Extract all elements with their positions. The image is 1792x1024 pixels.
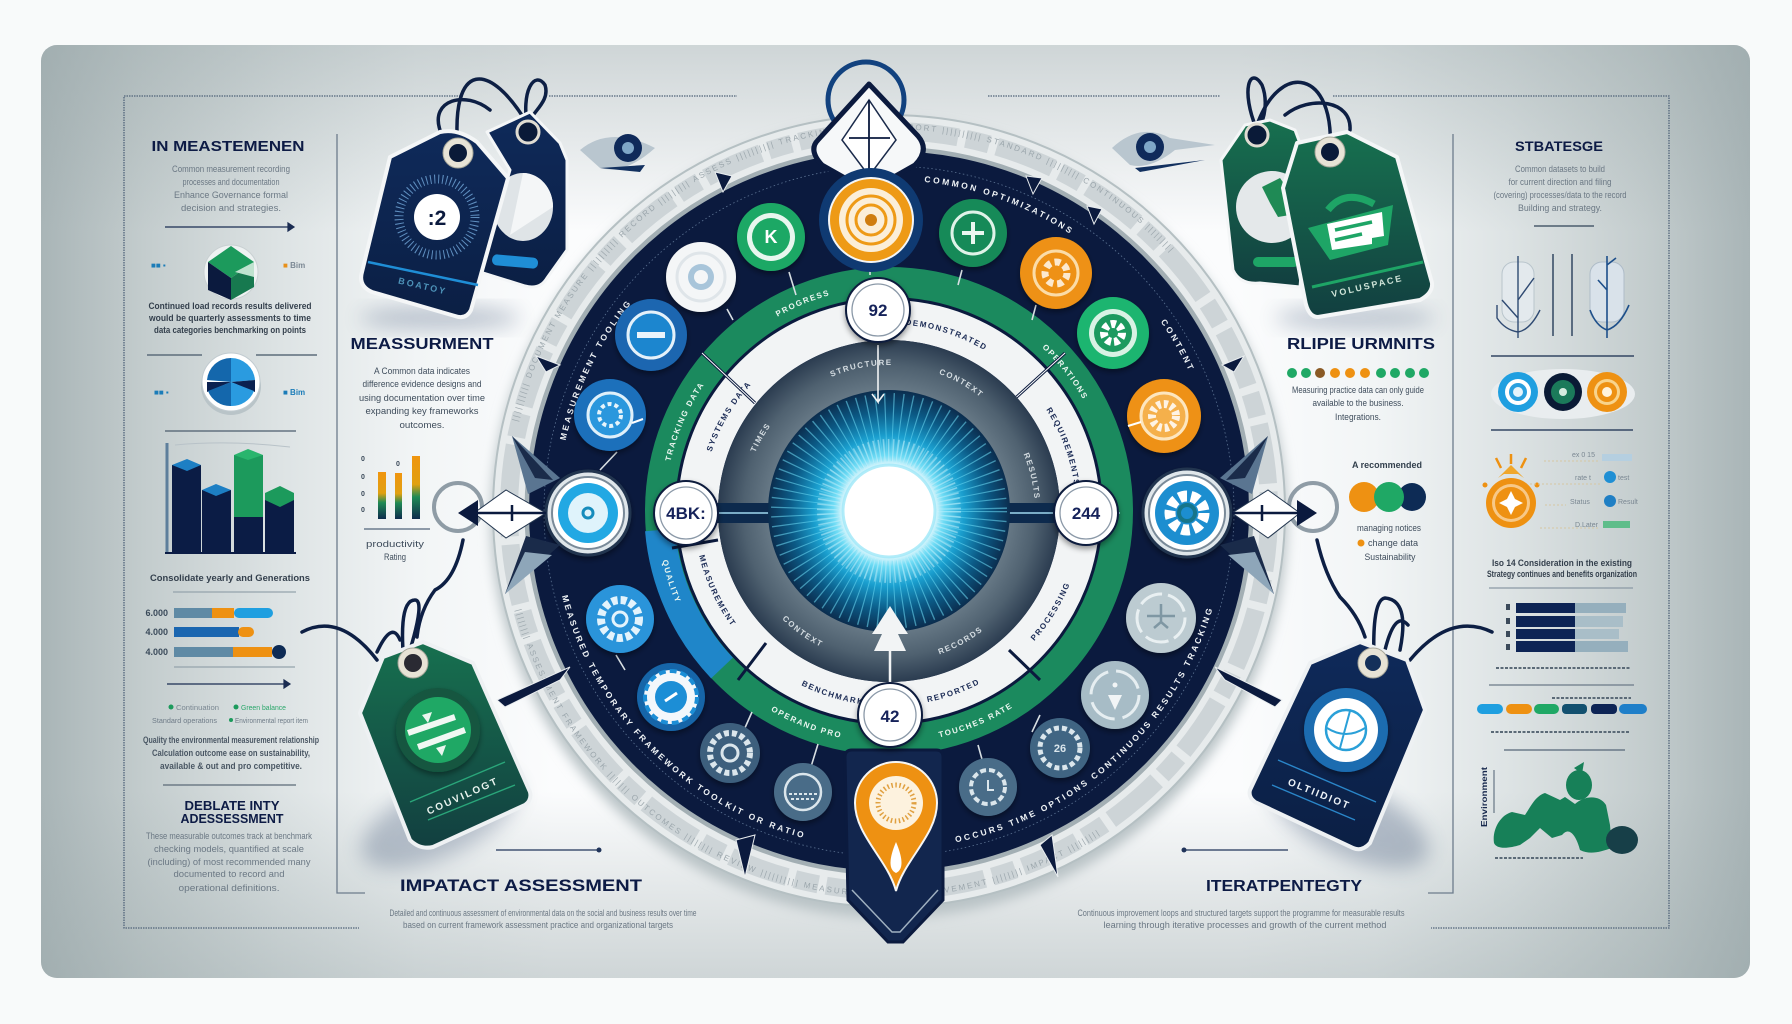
coin: pale compass — [1126, 583, 1196, 653]
node: left — [654, 481, 718, 545]
grey ring — [718, 340, 1060, 682]
impact text — [390, 908, 696, 930]
eye icon left — [580, 134, 655, 172]
three target icons — [1491, 369, 1635, 419]
venn text — [1357, 523, 1421, 562]
horizontal bars: 6.000 — [145, 608, 168, 618]
heading: RLIPIE URMNITS — [1287, 336, 1435, 353]
eye icon right — [1112, 132, 1215, 172]
white ring — [698, 320, 1080, 702]
assessment text: checking models, quantified at scale — [154, 844, 304, 854]
glow disk — [768, 390, 1010, 632]
rule with dot — [1184, 849, 1288, 851]
top target badge — [819, 168, 923, 272]
top pointer — [814, 62, 923, 192]
white ring labels: REQUIREMENTS — [1046, 407, 1080, 482]
assessment text: operational definitions. — [178, 883, 280, 893]
navy ring — [529, 151, 1249, 871]
measurement text — [359, 366, 485, 430]
navy ring labels: CONTENT — [1162, 320, 1194, 368]
assessment text: These measurable outcomes track at benchmark — [146, 831, 312, 841]
front tag: BOATOY — [397, 276, 448, 297]
badge rows: Status — [1570, 499, 1590, 506]
heading: impact assessment: IMPATACT ASSESSMENT — [400, 876, 643, 895]
back tag — [1221, 120, 1310, 287]
strategies text — [1494, 164, 1626, 213]
node: top — [846, 278, 910, 342]
white ring labels: PROCESSING — [1030, 584, 1069, 641]
right arrow — [1232, 483, 1337, 538]
legend: Standard operations — [152, 718, 218, 725]
legend: Continuation — [176, 705, 219, 712]
legend: Environmental report item — [235, 718, 308, 725]
right arrowheads — [1220, 436, 1274, 594]
ring marker triangles — [497, 172, 1282, 877]
central wheel — [432, 60, 1339, 944]
plant icons — [1497, 254, 1629, 338]
arrow — [165, 223, 294, 231]
small bar caption — [366, 539, 425, 562]
arrow — [167, 680, 290, 688]
white ring labels: DEMONSTRATED — [908, 320, 986, 349]
measurement text: A Common data indicates — [374, 366, 470, 376]
iteration text — [1078, 908, 1405, 930]
coin: green K: K — [764, 227, 778, 247]
bold note two — [143, 735, 319, 771]
bold note two: Calculation outcome ease on sustainability, — [152, 748, 310, 758]
tiny caption — [1491, 731, 1629, 733]
ring shadow — [491, 122, 1287, 918]
pointer arrow from bottom node — [872, 606, 908, 684]
legend — [152, 704, 308, 725]
bold note: data categories benchmarking on points — [154, 325, 306, 336]
white ring labels: SYSTEMS DATA — [706, 383, 750, 452]
measurement text: using documentation over time — [359, 393, 485, 403]
bold note two: available & out and pro competitive. — [160, 761, 302, 771]
bar chart — [165, 443, 296, 553]
venn text: change data — [1368, 538, 1418, 548]
badge rows: ex 0 15 — [1572, 452, 1595, 459]
coin: blue gear — [586, 585, 654, 653]
heading: measurement: MEASSURMENT — [350, 336, 494, 353]
impact text: Detailed and continuous assessment of environmental data on the social and business results over time — [390, 908, 696, 918]
hexagon labels — [151, 261, 305, 270]
pie labels: ■■ ▪ — [154, 388, 169, 397]
grey ring labels: CONTEXT — [783, 616, 823, 646]
grey ring labels — [750, 360, 1040, 654]
assessment text — [146, 831, 312, 893]
green ring labels: TOUCHES RATE — [938, 703, 1012, 737]
horizontal bars: 4.000 — [145, 627, 168, 637]
strategy note — [1487, 558, 1637, 580]
outer grey ring: |||||||||| DOCUMENT MEASURE |||||||||| RECORD ||||||||| ASSESS |||||||||| TRACKING |||||||||||| REPORT |||||||||| STANDARD ||||||||| CONTINUOUS ||||||||| — [512, 124, 1174, 422]
heading: in measurement: IN MEASTEMENEN — [152, 138, 304, 155]
small bar chart: 0 — [361, 474, 365, 481]
coin: orange pattern — [1020, 237, 1092, 309]
grey ring labels: STRUCTURE — [830, 360, 891, 376]
green ring labels: QUALITY — [662, 560, 681, 601]
right hub — [1143, 469, 1231, 557]
white ring labels: REPORTED — [926, 680, 978, 702]
badge rows: test — [1618, 475, 1629, 482]
measurement text: expanding key frameworks — [366, 406, 479, 416]
coin: blue pattern — [574, 379, 646, 451]
bold note — [148, 301, 312, 336]
badge rows: rate t — [1575, 475, 1591, 482]
ripple text — [1292, 385, 1424, 422]
pie labels: ■ Bim — [283, 388, 305, 397]
green map — [1494, 762, 1638, 854]
pie labels — [154, 388, 305, 397]
sun badge icon — [1482, 454, 1540, 528]
tag: bottom right navy — [1250, 642, 1442, 889]
grey ring labels: CONTEXT — [940, 369, 984, 396]
coin: slate clock — [959, 758, 1017, 816]
coin: blue gear two — [637, 663, 705, 731]
green ring labels: TRACKING DATA — [665, 384, 704, 460]
back tag — [480, 112, 567, 287]
front tag — [361, 131, 508, 317]
measurement text: difference evidence designs and — [362, 379, 482, 389]
outer grey ring: |||||||| ASSESSMENT FRAMEWORK ||||||| OUTCOMES |||||||| REVIEW |||||||||| MEASURES ||||||||| IMPROVEMENT |||||||| IMPACT ||||||||| — [514, 609, 1100, 894]
left hub — [546, 471, 630, 555]
coin: green K — [737, 203, 805, 271]
bold note: Continued load records results delivered — [148, 301, 312, 312]
coin: blue minus — [615, 299, 687, 371]
tag: top left pair — [360, 112, 567, 330]
node: left: 4BK: — [666, 504, 706, 523]
small bar chart: 0 — [361, 456, 365, 463]
impact text: based on current framework assessment practice and organizational targets — [403, 920, 673, 930]
left arrow — [434, 483, 546, 538]
small bar chart: 0 — [396, 461, 400, 468]
heading: debate entity assessment — [180, 798, 284, 826]
ripple text: Integrations. — [1335, 412, 1381, 422]
venn text: Sustainability — [1364, 552, 1416, 562]
heading: debate entity assessment: ADESSESSMENT — [180, 811, 284, 826]
assessment text: (including) of most recommended many — [148, 857, 311, 867]
strategies text: (covering) processes/data to the record — [1494, 190, 1626, 200]
ripple text: available to the business. — [1312, 398, 1404, 408]
coin: orange gear — [1127, 379, 1201, 453]
coin: white target — [666, 242, 736, 312]
venn circles — [1349, 482, 1426, 512]
bottom left heading block — [390, 848, 696, 930]
green ring labels — [662, 290, 1087, 738]
hexagon labels: ■ Bim — [283, 261, 305, 270]
front tag: :2 — [428, 207, 446, 230]
strategy note: Iso 14 Consideration in the existing — [1492, 558, 1632, 569]
tiny caption — [1552, 697, 1631, 699]
measurement text: outcomes. — [400, 420, 444, 430]
left intro text — [172, 164, 290, 213]
coin: slate gear two: 26 — [1054, 743, 1066, 755]
coin: slate gear — [700, 723, 760, 783]
grey ring labels: TIMES — [750, 424, 770, 451]
white ring labels: MEASUREMENT — [699, 554, 736, 624]
iteration text: learning through iterative processes and growth of the current method — [1104, 920, 1386, 930]
tag strings — [302, 78, 1492, 690]
navy ring labels — [560, 176, 1212, 842]
badge rows: D.Later — [1575, 522, 1599, 529]
coin: slate gear two — [1030, 718, 1090, 778]
node: bottom — [858, 683, 922, 747]
green ring labels: OPERAND PRO — [772, 706, 840, 738]
left arrowheads — [505, 436, 560, 594]
white ring labels — [699, 320, 1080, 704]
right column: strategies — [1477, 138, 1647, 858]
strategy note: Strategy continues and benefits organization — [1487, 569, 1637, 580]
front tag — [1283, 132, 1432, 317]
tag: bottom right navy: OLTIIDIOT — [1286, 777, 1352, 812]
heading: iteration: ITERATPENTEGTY — [1206, 878, 1362, 895]
node: top: 92 — [869, 301, 887, 320]
small bar caption: productivity — [366, 539, 425, 549]
badge rows: Result — [1618, 499, 1638, 506]
badge rows — [1530, 452, 1638, 529]
navy ring labels: COMMON OPTIMIZATIONS — [924, 176, 1072, 233]
navy ring labels: MEASURED TEMPORARY FRAMEWORK TOOLKIT OR RATIO — [562, 595, 804, 838]
left column — [143, 138, 319, 893]
horizontal bars — [145, 608, 286, 659]
hexagon chart — [204, 245, 258, 300]
coin: slate face — [774, 763, 832, 821]
small bar chart — [361, 456, 430, 529]
iteration text: Continuous improvement loops and structured targets support the programme for measurable results — [1078, 908, 1405, 918]
outer grey ring — [492, 114, 1286, 904]
bottom right heading block — [1078, 848, 1405, 930]
coin: pale shield — [1081, 661, 1149, 729]
left intro text: Enhance Governance formal — [174, 190, 288, 200]
outer frame lines — [124, 96, 1669, 928]
bottom pin badge — [845, 750, 943, 942]
middle left column: measurement — [350, 336, 494, 562]
dot row — [1287, 368, 1429, 378]
vertical axis label — [1480, 767, 1494, 827]
white ring labels: BENCHMARK — [802, 680, 862, 704]
rule with dot — [496, 849, 599, 851]
navy ring labels: MEASUREMENT TOOLING — [560, 302, 630, 440]
ring dividers — [672, 353, 1065, 680]
green ring — [660, 282, 1118, 740]
venn heading: A recommended — [1352, 460, 1422, 470]
node: right: 244 — [1072, 504, 1101, 523]
strategies text: for current direction and filing — [1508, 177, 1612, 187]
small bar caption: Rating — [384, 552, 406, 562]
green ring labels: PROGRESS — [775, 290, 828, 316]
coin: green plus — [939, 199, 1007, 267]
coin: green pattern — [1077, 297, 1149, 369]
left intro text: decision and strategies. — [181, 203, 281, 213]
ripple text: Measuring practice data can only guide — [1292, 385, 1424, 395]
bold note two: Quality the environmental measurement relationship — [143, 735, 319, 745]
hexagon labels: ■■ ▪ — [151, 261, 166, 270]
legend: Green balance — [241, 705, 286, 712]
grey ring labels: RECORDS — [938, 628, 982, 654]
thin inner dotted ring — [544, 166, 1234, 856]
tiny caption — [1495, 857, 1583, 859]
venn text: managing notices — [1357, 523, 1421, 533]
colour pills — [1477, 704, 1647, 714]
assessment text: documented to record and — [174, 869, 284, 879]
pie chart — [201, 353, 261, 415]
strategies text: Common datasets to build — [1515, 164, 1605, 174]
vertical axis label: Environment — [1480, 767, 1489, 827]
horizontal bars: 4.000 — [145, 647, 168, 657]
tiny caption — [1496, 667, 1630, 669]
left intro text: Common measurement recording — [172, 164, 290, 174]
tag: bottom left green — [348, 642, 532, 889]
small bar chart: 0 — [361, 507, 365, 514]
horizontal band — [660, 503, 1120, 523]
stacked horizontal bars — [1506, 603, 1628, 652]
small bar chart: 0 — [361, 491, 365, 498]
connector stems — [600, 262, 1153, 770]
pointer arrow from top node — [872, 345, 884, 402]
bar caption: Consolidate yearly and Generations — [150, 573, 310, 584]
node: bottom: 42 — [881, 707, 899, 726]
middle right column: ripple urgents — [1287, 336, 1435, 562]
grey ring labels: RESULTS — [1024, 452, 1040, 498]
navy ring labels: OCCURS TIME OPTIONS CONTINUOUS RESULTS TRACKING — [955, 608, 1212, 842]
node: right — [1054, 481, 1118, 545]
tag: bottom left green: COUVILOGT — [425, 776, 501, 817]
heading: STBATESGE — [1515, 138, 1603, 154]
heading: debate entity assessment: DEBLATE INTY — [184, 798, 280, 813]
strategies text: Building and strategy. — [1518, 203, 1602, 213]
left intro text: processes and documentation — [182, 177, 280, 187]
green ring labels: OPERATIONS — [1043, 344, 1087, 398]
blue segment of green ring — [660, 530, 722, 668]
tag: top right pair — [1221, 120, 1435, 330]
bold note: would be quarterly assessments to time — [148, 313, 311, 324]
front tag: VOLUSPACE — [1330, 273, 1404, 299]
